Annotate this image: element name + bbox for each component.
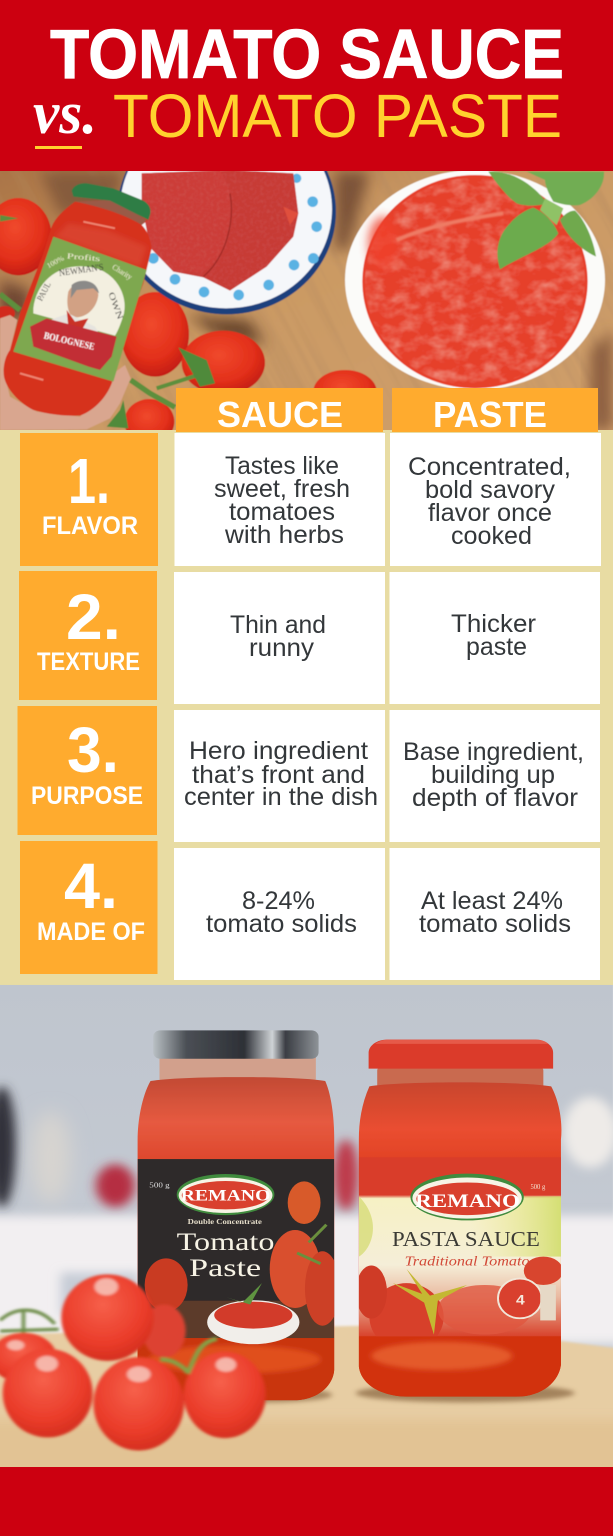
row 3 sauce cell: that’s front and xyxy=(192,761,365,789)
row 1 sauce cell: tomatoes xyxy=(229,498,335,526)
row 1 sauce cell: with herbs xyxy=(224,521,344,549)
row 3 paste cell xyxy=(390,710,600,842)
row 4 sauce cell: tomato solids xyxy=(206,910,357,938)
row 4 paste cell xyxy=(390,848,600,980)
row 3 label: purpose: 3. xyxy=(67,714,119,786)
pasta sauce jar: BOLOGNESE xyxy=(43,331,96,353)
row 2 paste cell xyxy=(390,572,600,704)
row 4 paste cell: At least 24% xyxy=(421,887,563,915)
row 1 sauce cell: sweet, fresh xyxy=(214,475,350,503)
pasta sauce jar: PASTA SAUCE xyxy=(392,1227,540,1251)
row 4 label: made of: MADE OF xyxy=(37,918,145,946)
pasta sauce jar: OWN xyxy=(106,291,126,322)
comparison table background xyxy=(0,430,613,985)
row 4 label: made of: 4. xyxy=(64,850,118,922)
tomato paste jar: Tomato xyxy=(177,1227,274,1256)
row 3 paste cell: Base ingredient, xyxy=(403,738,584,766)
pasta sauce jar: Traditional Tomato xyxy=(405,1254,530,1269)
title line 2: TOMATO PASTE xyxy=(113,82,562,150)
row 3 sauce cell: center in the dish xyxy=(184,783,378,811)
row 1 paste cell: bold savory xyxy=(425,476,555,504)
row 1 sauce cell xyxy=(174,433,385,566)
row 4 sauce cell: 8-24% xyxy=(242,887,315,915)
pasta sauce jar: 4 xyxy=(516,1292,525,1308)
bottom photo: product jars and tomatoes xyxy=(0,985,613,1476)
row 4 paste cell: tomato solids xyxy=(419,910,571,938)
row 2 label: texture: TEXTURE xyxy=(37,648,140,676)
pasta sauce jar: REMANO xyxy=(415,1191,520,1212)
row 1 label: flavor xyxy=(20,433,158,566)
pasta sauce jar: PAUL xyxy=(35,280,53,303)
bowl with tomato sauce and basil xyxy=(345,170,605,390)
basil leaves xyxy=(488,171,604,269)
row 2 label: texture: 2. xyxy=(66,581,121,653)
tomatoes xyxy=(0,198,377,444)
vs underline xyxy=(35,146,82,149)
row 3 sauce cell xyxy=(174,710,385,842)
title line 1: TOMATO SAUCE xyxy=(50,15,564,93)
title: vs.: vs. xyxy=(33,80,97,146)
row 1 paste cell: Concentrated, xyxy=(408,453,571,481)
row 1 paste cell: flavor once xyxy=(428,499,552,527)
pasta sauce jar xyxy=(356,1040,563,1397)
pasta sauce jar xyxy=(4,183,152,416)
tomato paste jar: REMANO xyxy=(181,1186,271,1204)
row 2 paste cell: paste xyxy=(466,633,527,661)
hand xyxy=(0,315,131,430)
pasta sauce jar: NEWMAN'S xyxy=(58,263,104,279)
column header: sauce xyxy=(176,388,383,435)
column header: paste: PASTE xyxy=(433,394,547,435)
pasta sauce jar: 500 g xyxy=(530,1183,545,1191)
row 2 sauce cell: Thin and xyxy=(230,611,326,639)
row 2 sauce cell: runny xyxy=(249,634,315,662)
row 1 label: flavor: 1. xyxy=(68,445,110,517)
row 3 sauce cell: Hero ingredient xyxy=(189,737,368,765)
row 4 label: made of xyxy=(20,841,158,974)
row 1 paste cell xyxy=(390,433,601,566)
plate with tomato paste xyxy=(119,171,336,315)
foreground tomatoes xyxy=(0,1274,266,1451)
column header: paste xyxy=(392,388,598,435)
pasta sauce jar: Charity xyxy=(111,262,134,282)
wooden table xyxy=(0,1326,613,1473)
row 1 label: flavor: FLAVOR xyxy=(42,512,138,540)
tomato paste jar: Paste xyxy=(189,1253,261,1282)
header band xyxy=(0,0,613,171)
row 2 sauce cell xyxy=(174,572,385,704)
row 3 paste cell: depth of flavor xyxy=(412,784,578,812)
tomato paste jar: 500 g xyxy=(149,1181,170,1189)
pasta sauce jar: Profits xyxy=(66,251,100,263)
row 3 paste cell: building up xyxy=(431,761,555,789)
row 1 sauce cell: Tastes like xyxy=(225,452,339,480)
tomato paste jar: Double Concentrate xyxy=(188,1217,263,1226)
row 3 label: purpose xyxy=(18,706,157,835)
row 2 label: texture xyxy=(19,571,157,700)
pasta sauce jar: 100% xyxy=(45,254,65,270)
tomato paste jar xyxy=(138,1030,340,1400)
row 3 label: purpose: PURPOSE xyxy=(31,782,143,810)
top photo: jar, paste plate, sauce bowl xyxy=(0,171,613,430)
row 4 sauce cell xyxy=(174,848,385,980)
row 1 paste cell: cooked xyxy=(451,522,532,550)
column header: sauce: SAUCE xyxy=(217,394,343,435)
row 2 paste cell: Thicker xyxy=(451,610,536,638)
footer band xyxy=(0,1467,613,1536)
